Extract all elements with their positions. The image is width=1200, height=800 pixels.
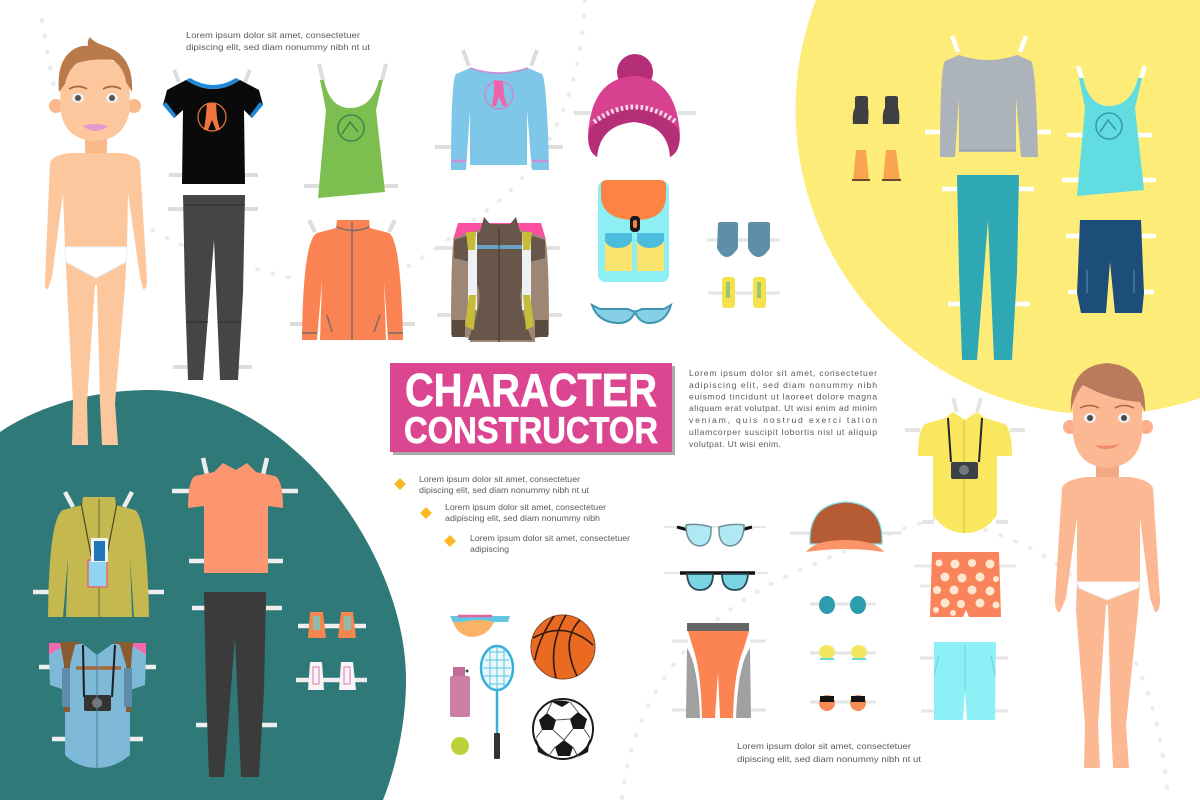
text: description paragraph: euismod tincidunt ut laoreet dolore magna bbox=[689, 392, 877, 402]
accessory: blue knee pads bbox=[707, 222, 780, 257]
character: right boy bbox=[1055, 363, 1160, 768]
garment: navy cargo shorts bbox=[1066, 220, 1156, 313]
icon: soccer ball bbox=[533, 699, 593, 759]
accessory: orange boots bbox=[852, 150, 901, 181]
text: top note: dipiscing elit, sed diam nonummy nibh nt ut bbox=[186, 42, 371, 52]
garment: olive jacket with lanyard bbox=[33, 492, 164, 618]
background circle: yellow bbox=[796, 0, 1200, 415]
garment: yellow shirt with camera bbox=[905, 398, 1025, 533]
garment: light blue sweater bbox=[435, 50, 563, 170]
accessory: dark boots bbox=[853, 96, 899, 124]
garment: teal trousers bbox=[942, 175, 1034, 360]
accessory: waist bag bbox=[450, 616, 510, 637]
text: bottom note bbox=[737, 741, 922, 764]
garment: black trousers bbox=[168, 195, 258, 380]
garment: brown hiking jacket with straps bbox=[436, 217, 562, 342]
bullet list bbox=[394, 474, 630, 554]
banner: title: CONSTRUCTOR bbox=[404, 410, 658, 451]
background circle: teal bbox=[0, 390, 406, 800]
accessory: orange sandals bbox=[298, 612, 366, 638]
garment: black t-shirt bbox=[163, 70, 263, 184]
bullet list: Lorem ipsum dolor sit amet, consectetuer bbox=[470, 533, 630, 543]
accessory: small yellow shoes bbox=[810, 645, 876, 659]
text: description paragraph: ullamcorper suscipit lobortis nisl ut aliquip bbox=[689, 427, 877, 437]
garment: grey sweater bbox=[925, 36, 1051, 157]
accessory: white sandals bbox=[296, 662, 367, 690]
icon: basketball bbox=[531, 615, 595, 679]
text: description paragraph: veniam, quis nostrud exerci tation bbox=[689, 415, 877, 425]
garment: orange polo shirt bbox=[172, 458, 298, 573]
accessory: floral shorts bbox=[914, 552, 1016, 617]
text: description paragraph bbox=[689, 368, 877, 449]
icon: water bottle bbox=[450, 667, 470, 717]
accessory: dark frame sunglasses bbox=[664, 573, 768, 590]
bag: turquoise backpack bbox=[598, 180, 669, 282]
bullet list: dipiscing elit, sed diam nonummy nibh nt ut bbox=[419, 485, 590, 495]
text: top note bbox=[186, 30, 371, 52]
banner: title bbox=[390, 363, 675, 455]
character: left boy bbox=[45, 37, 147, 445]
text: description paragraph: volutpat. Ut wisi enim. bbox=[689, 439, 781, 449]
text: description paragraph: adipiscing elit, sed diam nonummy nibh bbox=[689, 380, 877, 390]
hair bbox=[1071, 363, 1145, 412]
accessory: blue cat-eye sunglasses bbox=[592, 305, 671, 323]
hat: brown cap bbox=[790, 502, 902, 552]
garment: green tank top bbox=[304, 64, 398, 198]
garment: blue shirt with camera and backpack straps bbox=[39, 642, 156, 768]
accessory: small black orange sandals bbox=[810, 695, 876, 711]
accessory: small teal shoes bbox=[810, 596, 876, 614]
text: bottom note: dipiscing elit, sed diam nonummy nibh nt ut bbox=[737, 754, 922, 764]
bullet list: Lorem ipsum dolor sit amet, consectetuer bbox=[419, 474, 580, 484]
icon: badminton racket bbox=[481, 646, 513, 759]
text: description paragraph: aliquam erat volutpat. Ut wisi enim ad minim bbox=[689, 403, 877, 413]
bullet list: Lorem ipsum dolor sit amet, consectetuer bbox=[445, 502, 606, 512]
bullet list: adipiscing elit, sed diam nonummy nibh bbox=[445, 513, 600, 523]
garment: orange jacket bbox=[290, 220, 415, 340]
text: top note: Lorem ipsum dolor sit amet, consectetuer bbox=[186, 30, 360, 40]
accessory: light lens sunglasses bbox=[664, 524, 766, 546]
text: description paragraph: Lorem ipsum dolor sit amet, consectetuer bbox=[689, 368, 877, 378]
banner: title: CHARACTER bbox=[405, 364, 657, 416]
garment: orange swim trunks bbox=[672, 623, 766, 718]
garment: turquoise tank top bbox=[1062, 66, 1156, 196]
accessory: yellow shoes bbox=[708, 277, 780, 308]
icon: tennis ball bbox=[451, 737, 469, 755]
bullet list: adipiscing bbox=[470, 544, 509, 554]
text: bottom note: Lorem ipsum dolor sit amet, consectetuer bbox=[737, 741, 911, 751]
garment: dark trousers bbox=[192, 592, 282, 777]
hat: pink bobble beanie bbox=[574, 54, 696, 157]
garment: light blue shorts bbox=[920, 642, 1008, 720]
